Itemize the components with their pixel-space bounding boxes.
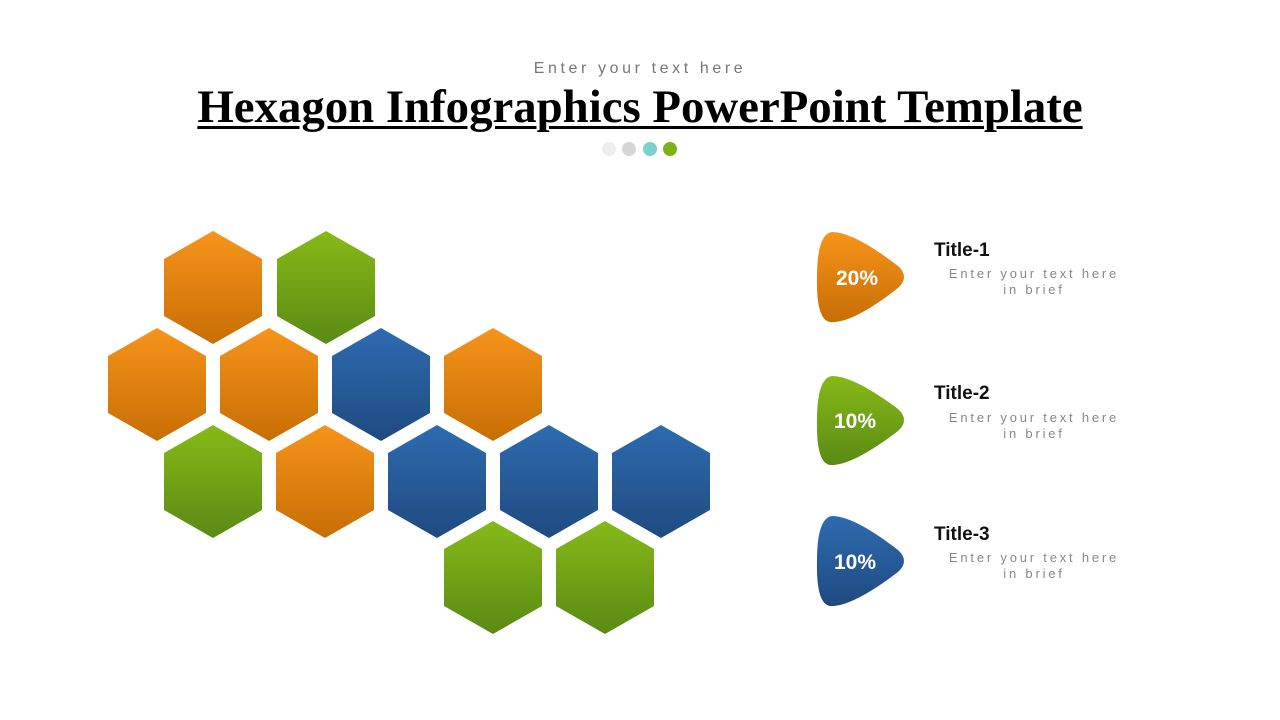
title 3: Title-3 xyxy=(934,524,990,545)
text 1: Enter your text here xyxy=(949,266,1119,281)
title: Hexagon Infographics PowerPoint Template xyxy=(197,81,1083,133)
title 2: Title-2 xyxy=(934,383,990,404)
text 1: in brief xyxy=(1003,282,1065,297)
text 3: in brief xyxy=(1003,566,1065,581)
text 3 xyxy=(949,550,1119,581)
text 2 xyxy=(949,410,1119,441)
text 1 xyxy=(949,266,1119,297)
subtitle: Enter your text here xyxy=(534,60,746,77)
text 3: Enter your text here xyxy=(949,550,1119,565)
text 2: Enter your text here xyxy=(949,410,1119,425)
badge 3: 10% xyxy=(834,551,876,574)
title 1: Title-1 xyxy=(934,240,990,261)
badge 2: 10% xyxy=(834,410,876,433)
text 2: in brief xyxy=(1003,426,1065,441)
badge 1: 20% xyxy=(836,267,878,290)
